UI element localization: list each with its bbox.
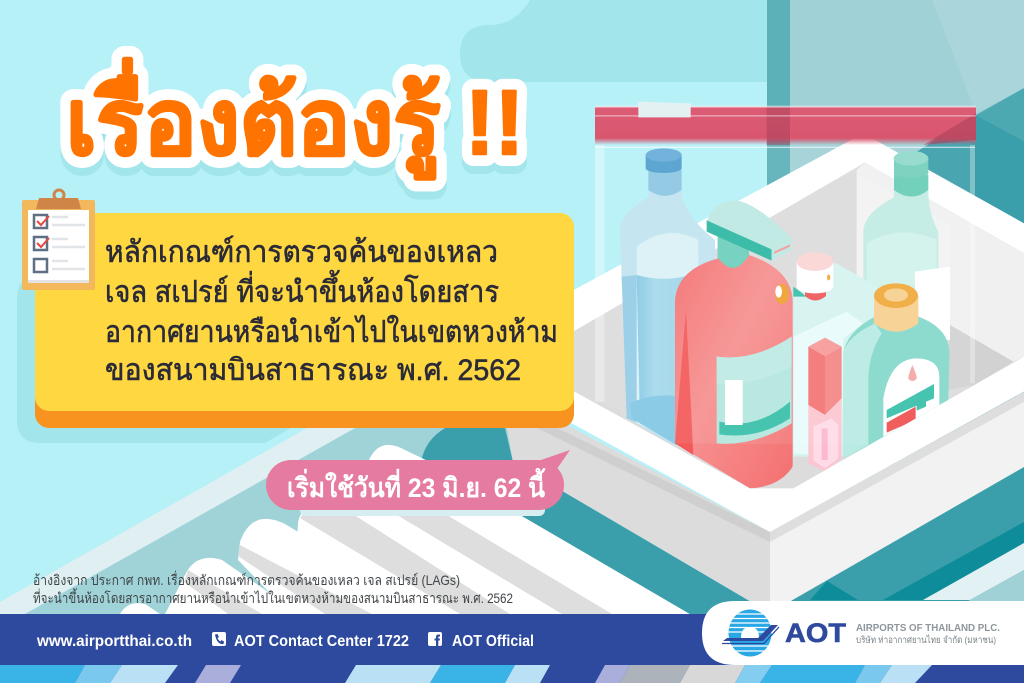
teal bottle with label	[843, 283, 949, 458]
red pump bottle	[675, 201, 793, 488]
icon: phone	[212, 632, 226, 646]
pill shadow	[300, 500, 545, 516]
teal band under box	[522, 492, 750, 614]
company name Thai: บริษัท ท่าอากาศยานไทย จำกัด (มหาชน)	[856, 634, 996, 646]
facebook name: AOT Official	[452, 633, 534, 650]
box interior	[570, 163, 1024, 497]
source note: ที่จะนำขึ้นห้องโดยสารอากาศยานหรือนำเข้าไปในเขตหวงห้ามของสนามบินสาธารณะ พ.ศ. 2562	[33, 588, 513, 606]
blue bottle	[620, 148, 715, 447]
panel text: หลักเกณฑ์การตรวจค้นของเหลว	[105, 235, 498, 269]
callout: start date pill	[266, 450, 570, 510]
illustration: box with liquids bag	[487, 102, 1024, 613]
box front rim	[570, 356, 1024, 532]
AOT wordmark: AOT	[785, 618, 847, 648]
website: www.airportthai.co.th	[36, 633, 192, 650]
shadow blob behind panel	[17, 282, 330, 443]
small jar and pale box	[793, 252, 874, 456]
panel text: ของสนามบินสาธารณะ พ.ศ. 2562	[105, 354, 521, 387]
icon: AOT globe	[722, 608, 779, 658]
footer stripes	[0, 665, 1024, 683]
panel text	[105, 235, 558, 387]
teal lower right	[770, 467, 1024, 614]
panel: yellow criteria card	[35, 213, 574, 428]
title: เรื่องต้องรู้ !!	[66, 65, 524, 188]
clear bag	[595, 102, 976, 445]
title: เรื่องต้องรู้ !!	[66, 57, 524, 180]
panel text: อากาศยานหรือนำเข้าไปในเขตหวงห้าม	[105, 314, 558, 349]
lip gloss	[808, 338, 842, 472]
box side walls	[500, 390, 1024, 613]
callout: start date pill: เริ่มใช้วันที่ 23 มิ.ย. 62 นี้	[287, 467, 546, 503]
icon: facebook	[428, 632, 442, 646]
footer bar	[0, 614, 1024, 683]
rollers	[120, 445, 693, 615]
AOT logo plate	[702, 601, 1024, 665]
source note: อ้างอิงจาก ประกาศ กพท. เรื่องหลักเกณฑ์การตรวจค้นของเหลว เจล สเปรย์ (LAGs)	[33, 571, 460, 588]
source note	[33, 571, 513, 606]
panel text: เจล สเปรย์ ที่จะนำขึ้นห้องโดยสาร	[105, 270, 499, 309]
green bottle	[863, 151, 950, 340]
box back rim	[570, 133, 1024, 333]
contact center: AOT Contact Center 1722	[234, 633, 409, 650]
title: เรื่องต้องรู้ !!	[66, 57, 524, 180]
icon: clipboard checklist	[22, 190, 95, 290]
company name: AIRPORTS OF THAILAND PLC.	[856, 622, 1000, 634]
